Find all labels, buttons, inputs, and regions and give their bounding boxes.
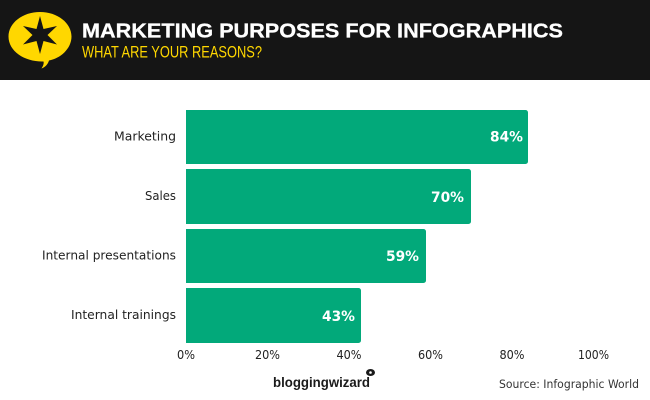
bar: Sales 70%: 70% bbox=[431, 190, 464, 206]
bar: Internal trainings 43% bbox=[71, 288, 361, 343]
bar: Marketing 84% bbox=[114, 110, 528, 164]
bar: Sales 70% bbox=[145, 169, 471, 224]
x axis labels: 80% bbox=[500, 348, 524, 362]
bar: Internal presentations 59%: 59% bbox=[386, 249, 419, 265]
bar chart bbox=[42, 110, 609, 362]
bar: Internal trainings 43%: 43% bbox=[322, 309, 355, 325]
bar: Internal trainings 43%: Internal trainings bbox=[71, 308, 176, 322]
subtitle: WHAT ARE YOUR REASONS? bbox=[82, 44, 262, 62]
x axis labels: 0% bbox=[177, 348, 195, 362]
x axis labels: 100% bbox=[578, 348, 609, 362]
bar: Internal presentations 59%: Internal presentations bbox=[42, 248, 176, 262]
source note: Source: Infographic World bbox=[499, 377, 639, 391]
bar: Internal presentations 59% bbox=[42, 229, 426, 283]
x axis labels: 60% bbox=[418, 348, 443, 362]
bar: Marketing 84%: 84% bbox=[490, 130, 523, 146]
x axis labels bbox=[177, 348, 609, 362]
icon: speech bubble with star bbox=[8, 12, 72, 68]
bar: Sales 70%: Sales bbox=[145, 189, 176, 203]
bar: Marketing 84%: Marketing bbox=[114, 130, 176, 144]
x axis labels: 20% bbox=[255, 348, 280, 362]
x axis labels: 40% bbox=[336, 348, 362, 362]
header band bbox=[0, 0, 650, 80]
title: MARKETING PURPOSES FOR INFOGRAPHICS bbox=[82, 20, 563, 42]
logo: bloggingwizard: bloggingwizard bbox=[273, 374, 370, 390]
